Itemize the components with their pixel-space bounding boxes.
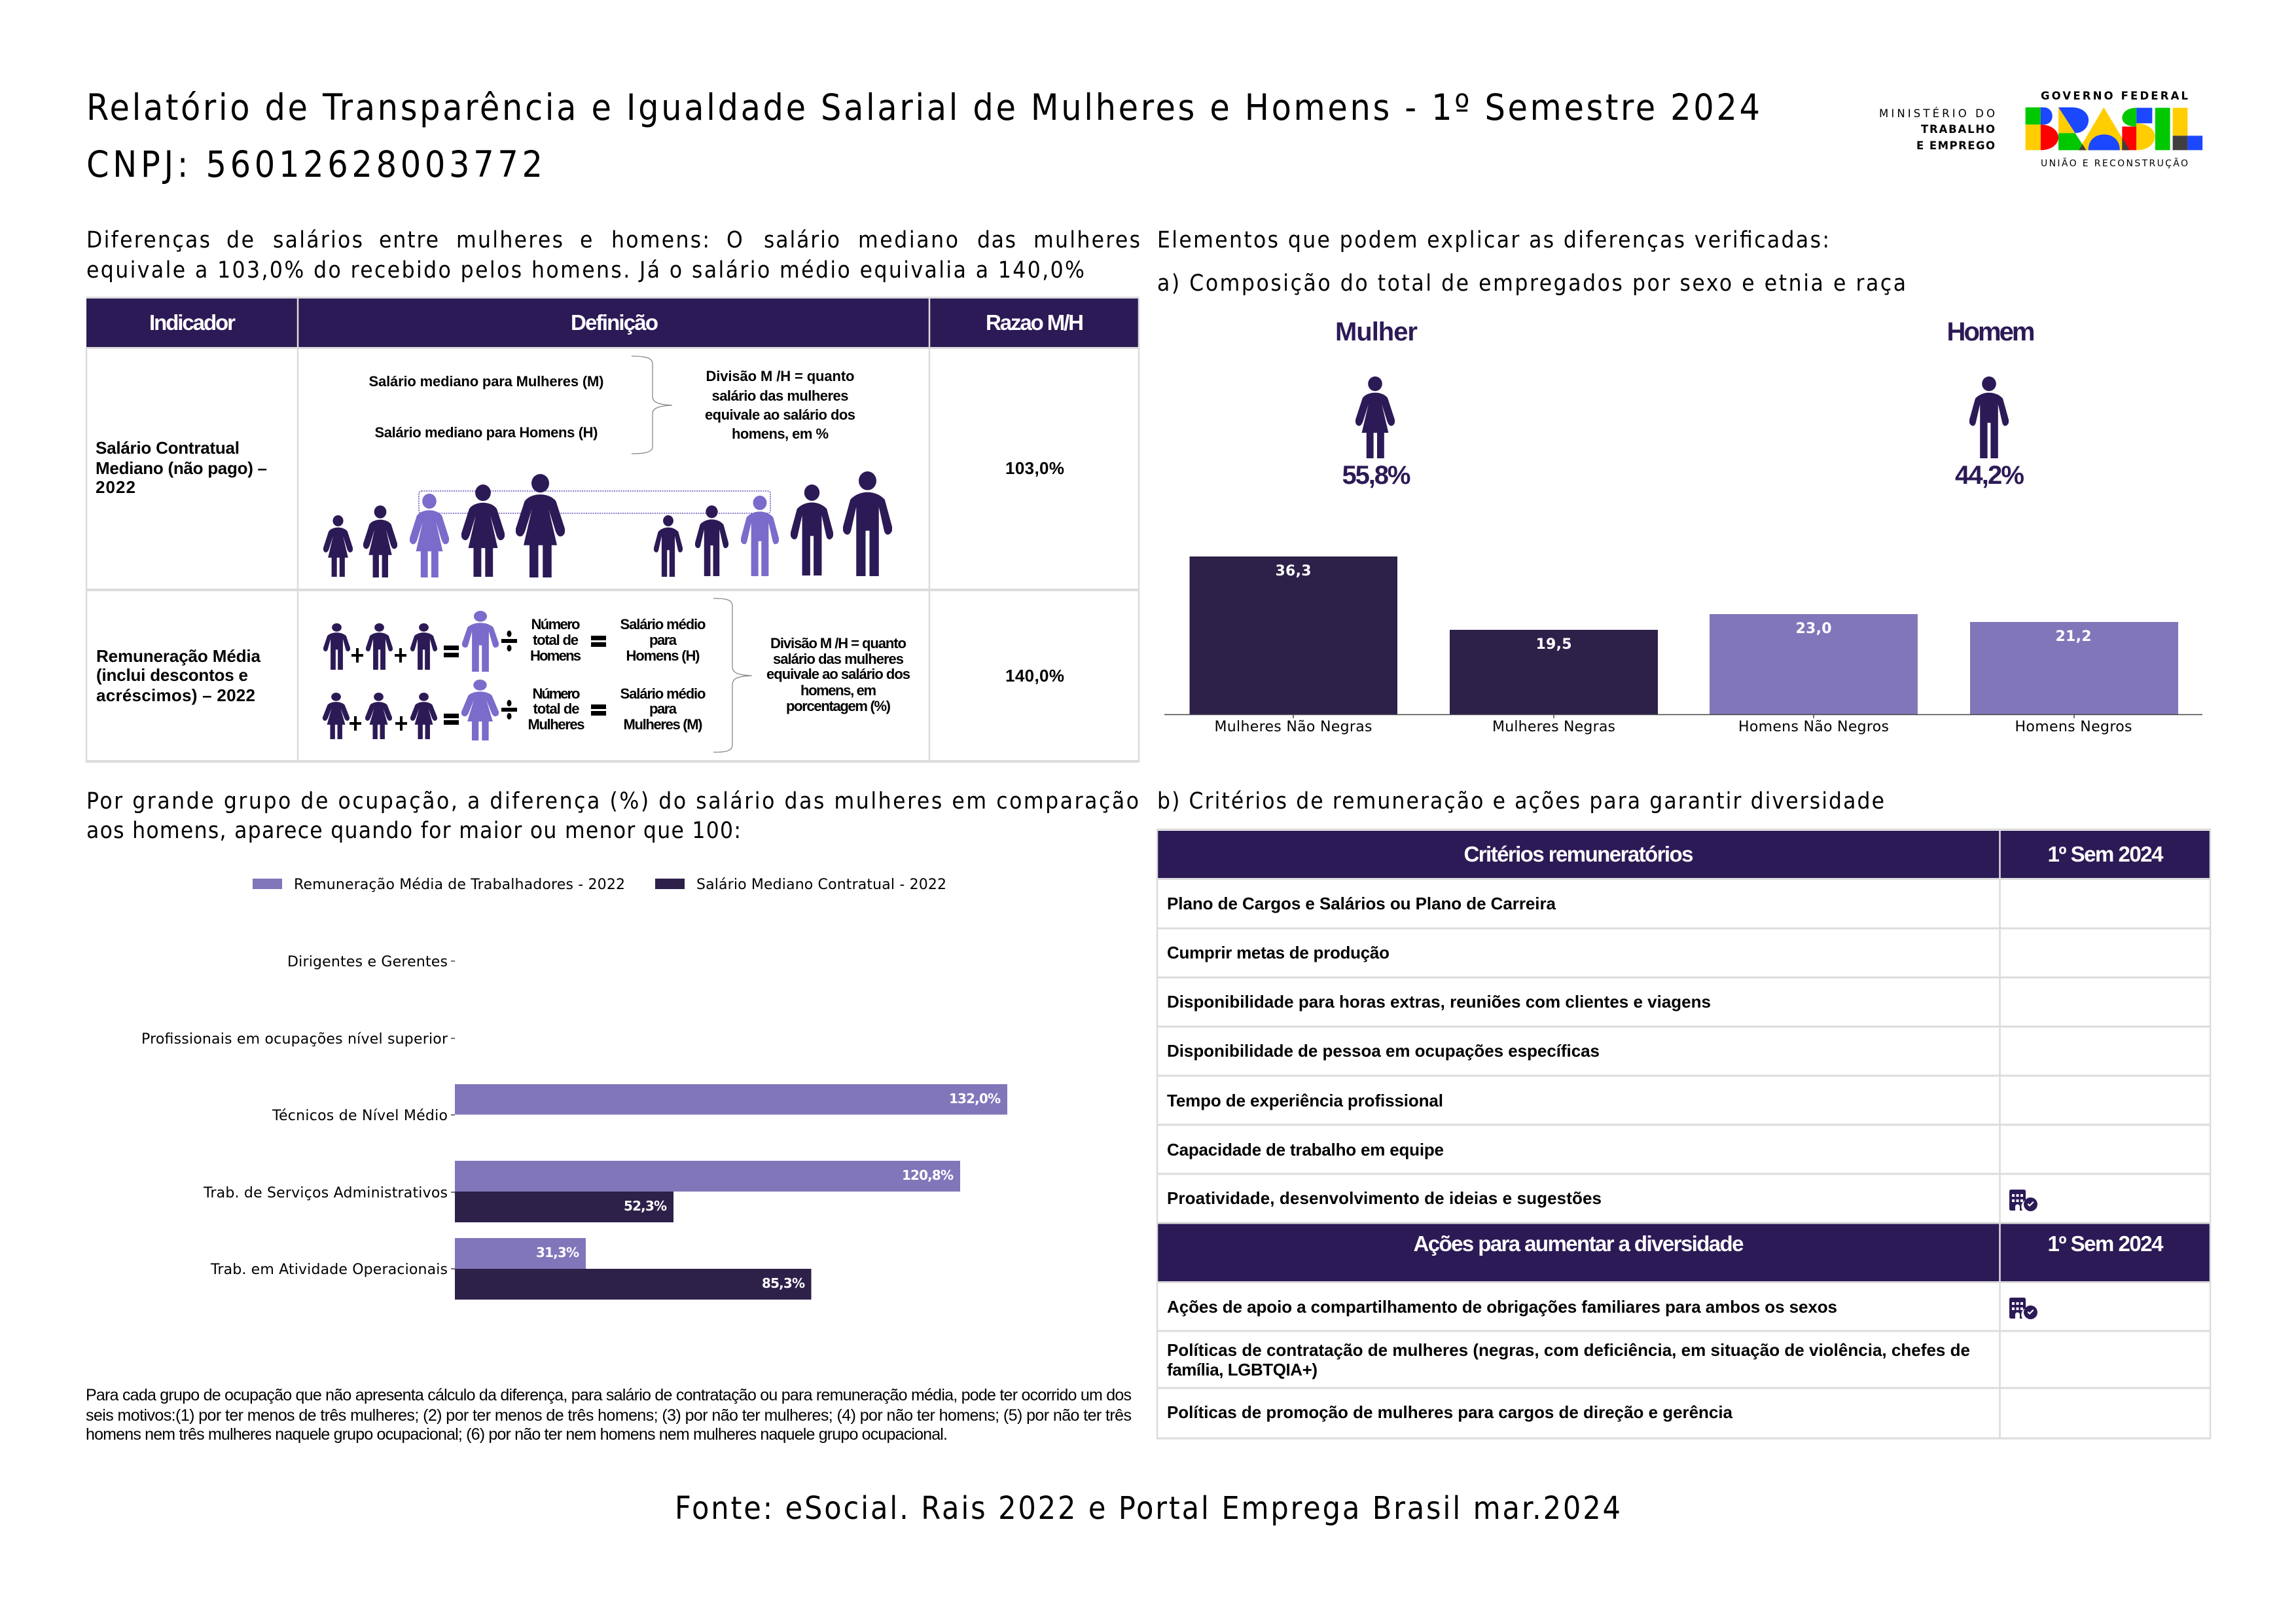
table: indicators [86,297,1139,763]
table header: criteria: 1º Sem 2024 [2047,842,2164,866]
table header: Indicador [149,310,236,335]
criteria rows: Plano de Cargos e Salários ou Plano de Carreira [1167,894,1556,913]
text block: salary differences: Diferenças [86,227,210,253]
bracket [713,598,752,752]
text block: elements that explain differences: Elementos que podem explicar as diferenças verificadas: [1157,227,1829,253]
bar chart: composition: 36,3 [1275,563,1312,579]
median salary definition texts: Salário mediano para Mulheres (M) [369,373,603,390]
text block: salary differences: entre [379,227,439,253]
table: criteria and actions [1157,830,2211,1439]
logo: Governo Federal Brasil: UNIÃO E RECONSTRUÇÃO [2041,158,2188,169]
table header: actions [1158,1224,2210,1281]
legend: Remuneração Média de Trabalhadores - 2022 [294,877,625,893]
title [86,86,1760,185]
median salary definition texts: salário das mulheres [712,388,848,404]
table header: actions: Ações para aumentar a diversidade [1414,1231,1744,1256]
bracket [632,356,672,454]
text block: salary differences: homens: [611,227,709,253]
text block: salary differences: mulheres [1033,227,1140,253]
average pay explanation: porcentagem (%) [786,698,891,714]
horizontal bar chart: occupation: 132,0% [949,1091,1001,1106]
text block: salary differences [86,227,1140,283]
bar chart: composition: 23,0 [1796,621,1831,637]
text block: occupation groups: aos homens, aparece quando for maior ou menor que 100: [86,818,741,844]
average pay explanation [766,635,910,714]
average pay explanation: Divisão M /H = quanto [770,635,906,651]
text block: elements that explain differences [1157,227,1906,297]
row: average pay label: acréscimos) – 2022 [96,685,255,705]
formula: women: Número [533,685,580,702]
icon: building with check [2009,1298,2037,1319]
heading: criteria: b) Critérios de remuneração e ações para garantir diversidade [1157,788,1884,814]
average pay explanation: salário das mulheres [773,651,904,667]
row: median salary label [96,438,267,497]
horizontal bar chart: occupation: 31,3% [536,1245,579,1260]
horizontal bar chart: occupation: Trab. em Atividade Operacionais [210,1262,448,1278]
table header [86,299,1139,347]
horizontal bar chart: occupation: Dirigentes e Gerentes [287,954,448,970]
horizontal bar chart: occupation: 120,8% [902,1167,954,1183]
median salary definition texts: Salário mediano para Homens (H) [374,424,598,441]
bar chart: composition: Mulheres Não Negras [1215,719,1372,735]
table header: Definição [571,310,658,335]
formula: men: Homens [530,647,581,664]
action rows: Políticas de promoção de mulheres para cargos de direção e gerência [1167,1402,1733,1422]
median salary definition texts: Divisão M /H = quanto [706,368,855,384]
bar chart: composition: Homens Não Negros [1738,719,1889,735]
footnote: homens nem três mulheres naquele grupo ocupacional; (6) por não ter nem homens nem mulheres naquele grupo ocupacional. [86,1425,948,1444]
row: median salary label: Salário Contratual [96,438,240,458]
bar chart: composition: Homens Negros [2015,719,2132,735]
horizontal bar chart: occupation: Profissionais em ocupações nível superior [141,1031,448,1048]
text block: occupation groups [86,788,1139,844]
action rows: Ações de apoio a compartilhamento de obrigações familiares para ambos os sexos [1167,1297,1837,1317]
formula: women: total de [533,701,580,717]
formula: men: Número [531,616,580,632]
statistic: woman [1335,318,1418,490]
median salary definition texts [369,368,855,442]
title: Relatório de Transparência e Igualdade Salarial de Mulheres e Homens - 1º Semestre 2024 [86,86,1760,128]
action rows: Políticas de contratação de mulheres (negras, com deficiência, em situação de violência, chefes de [1167,1340,1970,1360]
median salary definition texts: homens, em % [732,426,829,442]
formula: men: Salário médio [620,616,706,632]
formula: men: total de [533,632,579,648]
table header: criteria: Critérios remuneratórios [1463,842,1694,866]
footnote: seis motivos:(1) por ter menos de três mulheres; (2) por ter menos de três homens; (3) por não ter mulheres; (4) por não ter homens; (5) por não ter três [86,1406,1132,1425]
legend: Salário Mediano Contratual - 2022 [696,877,946,893]
horizontal bar chart: occupation: 52,3% [624,1198,667,1214]
row: median salary label: 2022 [96,477,135,497]
text block: occupation groups: Por grande grupo de ocupação, a diferença (%) do salário das mulheres em comparação [86,788,1139,814]
text block: salary differences: salário [764,227,840,253]
horizontal bar chart: occupation: Trab. de Serviços Administrativos [203,1185,448,1201]
logo: Ministério do Trabalho e Emprego: E EMPREGO [1916,139,1995,152]
criteria rows [1167,894,1711,1208]
horizontal bar chart: occupation: Técnicos de Nível Médio [272,1108,448,1124]
footnote [86,1386,1132,1444]
legend [253,877,946,893]
text block: salary differences: de [226,227,254,253]
statistic: man: 44,2% [1955,461,2024,490]
formula: women: Mulheres (M) [623,716,703,733]
text block: salary differences: e [580,227,592,253]
median salary definition texts: equivale ao salário dos [705,407,855,423]
formula: women: para [649,701,677,717]
action rows [1167,1297,1970,1422]
criteria rows: Disponibilidade para horas extras, reuniões com clientes e viagens [1167,992,1711,1012]
statistic: man: Homem [1946,318,2036,346]
table header: Razao M/H [986,310,1084,335]
logo: Governo Federal Brasil: GOVERNO FEDERAL [2041,90,2188,102]
text block: salary differences: mediano [858,227,958,253]
average pay explanation: homens, em [800,682,876,699]
median people illustration [323,471,892,577]
footnote: Para cada grupo de ocupação que não apresenta cálculo da diferença, para salário de contratação ou para remuneração média, pode ter ocorrido um dos [86,1386,1132,1404]
bar chart: composition [1164,556,2202,735]
text block: salary differences: equivale a 103,0% do recebido pelos homens. Já o salário médio equivalia a 140,0% [86,257,1085,283]
logo: Governo Federal Brasil [2026,90,2202,169]
horizontal bar chart: occupation [141,954,1007,1300]
text block: salary differences: O [726,227,743,253]
bar chart: composition: 21,2 [2055,629,2092,645]
criteria rows: Proatividade, desenvolvimento de ideias e sugestões [1167,1188,1602,1208]
icon: building with check [2009,1190,2037,1211]
row: median salary label: Mediano (não pago) – [96,458,267,478]
table header: actions: 1º Sem 2024 [2047,1231,2164,1256]
statistic: woman: Mulher [1335,318,1418,346]
formula: women: Salário médio [620,685,706,702]
horizontal bar chart: occupation: 85,3% [762,1275,805,1291]
formula: women [323,680,706,740]
text block: elements that explain differences: a) Composição do total de empregados por sexo e etnia e raça [1157,270,1906,297]
criteria rows: Tempo de experiência profissional [1167,1091,1443,1110]
logo: Ministério do Trabalho e Emprego: MINISTÉRIO DO [1879,107,1995,120]
bar chart: composition: 19,5 [1535,636,1572,653]
average pay explanation: equivale ao salário dos [766,666,910,682]
formula: women: Mulheres [528,716,585,733]
formula: men [323,611,706,672]
ratio: 103,0%: 103,0% [1005,458,1064,478]
action rows: família, LGBTQIA+) [1167,1360,1318,1379]
criteria rows: Capacidade de trabalho em equipe [1167,1140,1444,1159]
statistic: woman: 55,8% [1342,461,1411,490]
logo: Ministério do Trabalho e Emprego [1879,107,1995,152]
row: average pay label [96,646,261,705]
logo: Ministério do Trabalho e Emprego: TRABALHO [1921,123,1995,136]
text block: salary differences: das [977,227,1016,253]
bar chart: composition: Mulheres Negras [1492,719,1615,735]
criteria rows: Cumprir metas de produção [1167,943,1390,962]
row: average pay label: (inclui descontos e [96,665,248,685]
row: average pay label: Remuneração Média [96,646,261,666]
formula: men: Homens (H) [626,647,700,664]
criteria rows: Disponibilidade de pessoa em ocupações específicas [1167,1041,1600,1061]
statistic: man [1946,318,2036,490]
formula: men: para [649,632,677,648]
ratio: 140,0%: 140,0% [1005,666,1064,685]
table header: criteria [1158,831,2210,878]
title: CNPJ: 56012628003772 [86,143,543,185]
source: Fonte: eSocial. Rais 2022 e Portal Emprega Brasil mar.2024 [675,1490,1621,1527]
text block: salary differences: mulheres [456,227,563,253]
text block: salary differences: salários [273,227,363,253]
